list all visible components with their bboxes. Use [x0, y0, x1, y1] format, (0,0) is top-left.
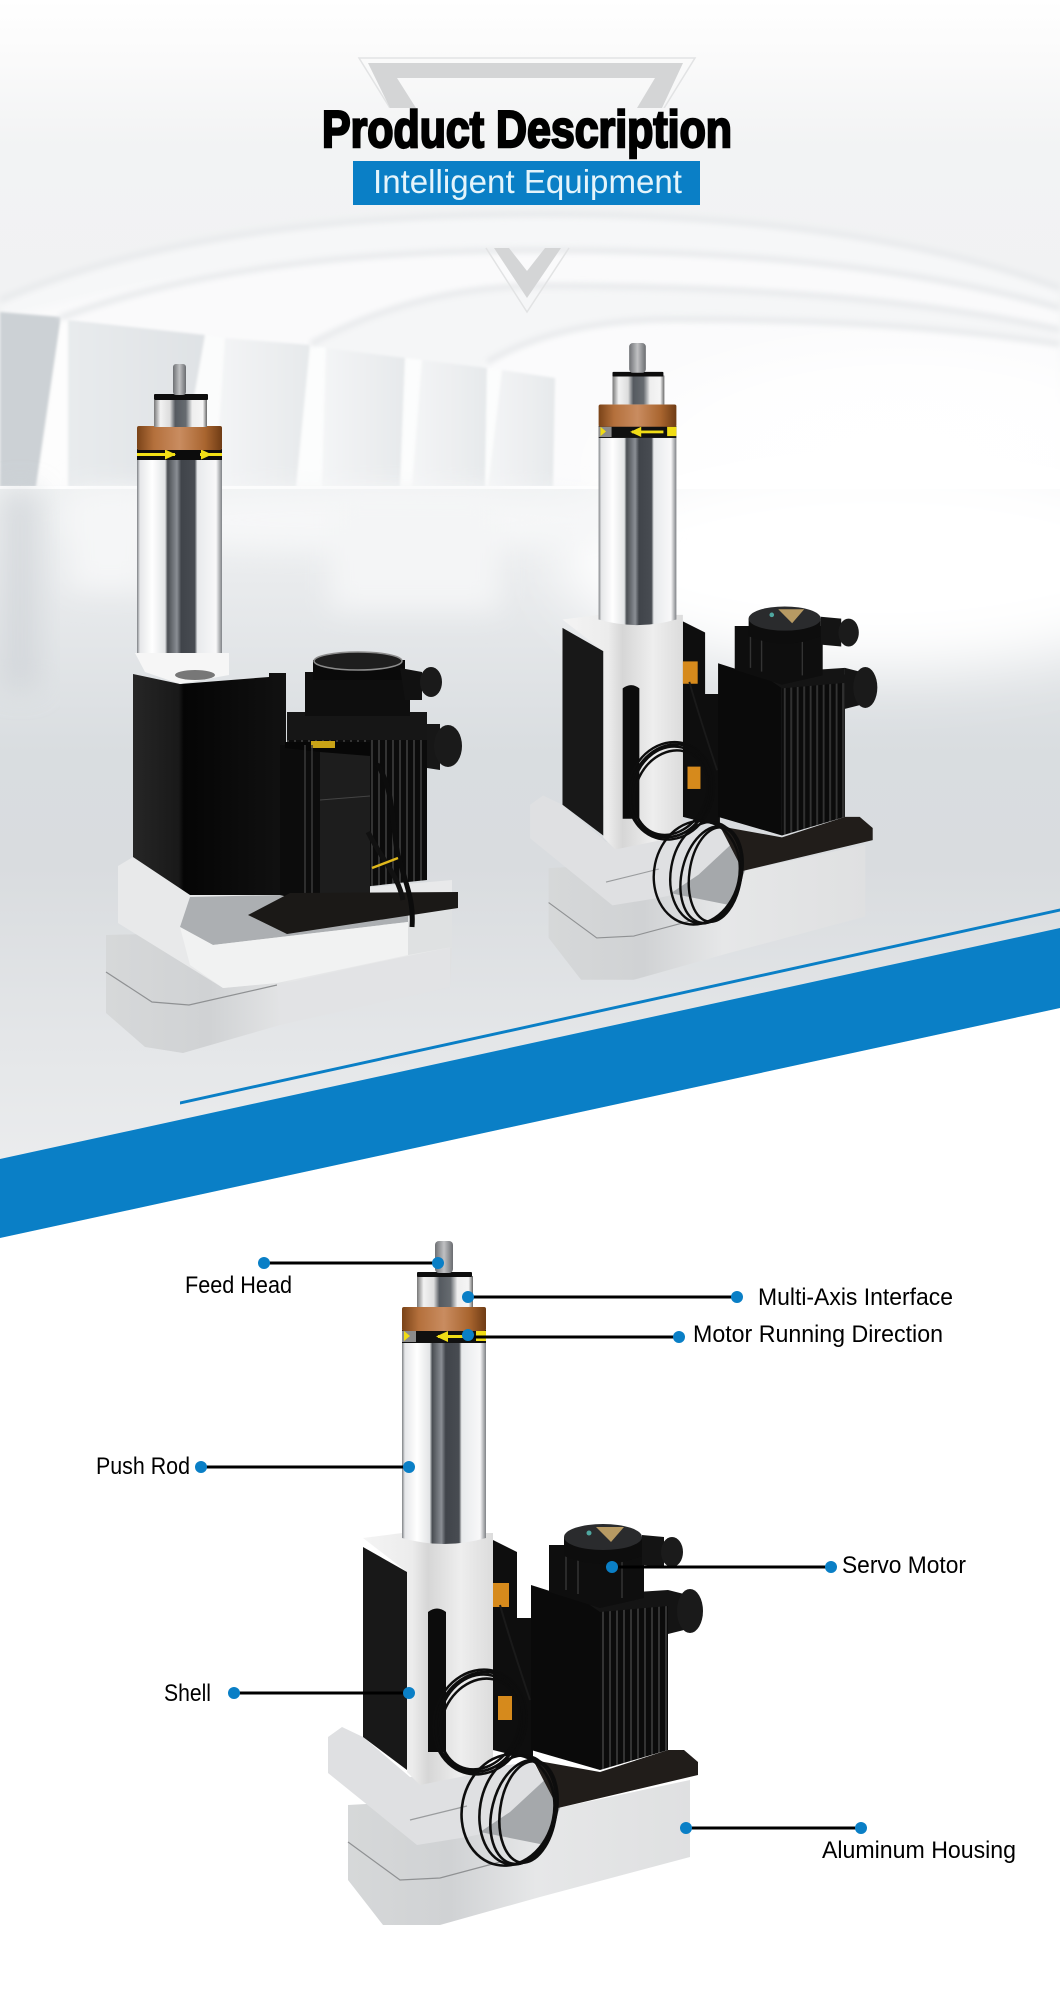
- product photo: right actuator: [530, 343, 877, 980]
- lower aluminium base: [348, 1780, 690, 1925]
- actuator black body: [133, 673, 286, 895]
- blue diagonal band: [0, 928, 1060, 1238]
- callout: Shell: Shell: [164, 1680, 211, 1707]
- copper ring: [402, 1307, 486, 1331]
- upper aluminium base: [328, 1727, 560, 1845]
- callout: Push Rod: [96, 1453, 415, 1480]
- callout: Push Rod: Push Rod: [96, 1453, 190, 1480]
- wire coil upper: [420, 1657, 540, 1787]
- white lower page area below the band: [0, 1008, 1060, 1250]
- callout: Feed Head: [185, 1257, 444, 1299]
- white cast housing: [363, 1533, 493, 1785]
- callout: Feed Head: Feed Head: [185, 1272, 292, 1299]
- decorative small chevron: [486, 248, 569, 312]
- subtitle banner: [353, 161, 700, 205]
- white collar: [135, 653, 229, 684]
- callout: Servo Motor: Servo Motor: [842, 1552, 966, 1579]
- product photo: left actuator: [106, 364, 462, 1053]
- callout: Servo Motor: [606, 1552, 966, 1579]
- lower aluminium base: [106, 930, 452, 1053]
- title: Product Description: [322, 101, 732, 159]
- proximity sensors: [493, 1583, 530, 1720]
- callout: Multi-Axis Interface: Multi-Axis Interface: [758, 1284, 953, 1311]
- callout: Motor Running Direction: Motor Running Direction: [693, 1321, 943, 1348]
- back plate: [493, 1540, 533, 1760]
- product photo: labelled actuator, bottom panel: [328, 1241, 703, 1925]
- subtitle text: Intelligent Equipment: [373, 163, 682, 200]
- callout: Aluminum Housing: [680, 1822, 1016, 1864]
- black band with arrows: [137, 449, 222, 460]
- callout: Aluminum Housing: Aluminum Housing: [822, 1837, 1016, 1864]
- rear motor: [287, 652, 462, 895]
- housing slot: [428, 1608, 446, 1752]
- wire coil lower: [451, 1746, 568, 1874]
- neck and pin: [154, 364, 208, 427]
- copper ring: [137, 426, 222, 450]
- callout: Shell: [164, 1680, 415, 1707]
- decorative triangle behind title: [358, 57, 696, 108]
- black side panel: [363, 1547, 407, 1770]
- neck and pin: [417, 1241, 473, 1307]
- chrome cylinder: [137, 458, 222, 653]
- motor mounting plate: [248, 892, 458, 934]
- black band with arrows: [402, 1330, 486, 1343]
- hero background: white tunnel and reflective floor: [0, 94, 1060, 1159]
- mounting plate: [533, 1750, 698, 1808]
- callout: Multi-Axis Interface: [462, 1284, 953, 1311]
- motor cable: [377, 764, 412, 927]
- motor body: [531, 1524, 703, 1770]
- blue accent line: [180, 908, 1060, 1104]
- chrome cylinder: [402, 1343, 486, 1544]
- upper aluminium base: [118, 857, 452, 988]
- front motor: [280, 741, 370, 908]
- callout: Motor Running Direction: [462, 1321, 943, 1348]
